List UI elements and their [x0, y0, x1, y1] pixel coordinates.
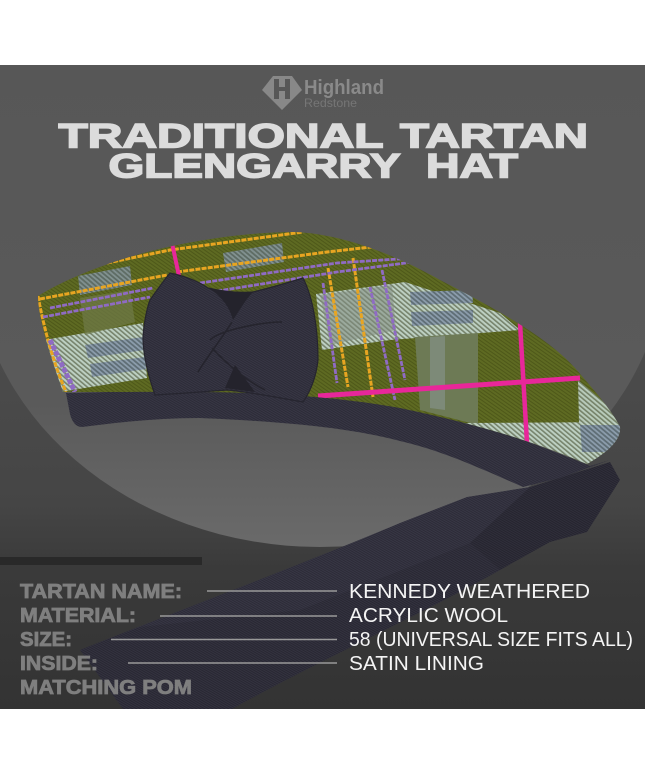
hat tail ribbon	[80, 462, 620, 709]
connector lines	[111, 591, 337, 663]
spec labels: MATCHING POM	[20, 677, 192, 699]
tartan hat crown	[30, 225, 630, 475]
title: TRADITIONAL	[58, 118, 384, 156]
spec labels: INSIDE:	[20, 653, 98, 675]
spec values: ACRYLIC WOOL	[349, 605, 508, 627]
title: GLENGARRY	[108, 148, 401, 186]
spec values: KENNEDY WEATHERED	[349, 581, 590, 603]
icon: logo diamond	[262, 76, 302, 110]
title: HAT	[426, 148, 518, 186]
spec values: SATIN LINING	[349, 653, 484, 675]
hat band	[66, 390, 610, 487]
pink stripes	[172, 243, 580, 443]
spec values: 58 (UNIVERSAL SIZE FITS ALL)	[349, 629, 633, 651]
logo: Redstone	[304, 96, 357, 110]
background curved arc	[0, 255, 645, 547]
pale check blocks	[44, 243, 625, 466]
title	[58, 118, 588, 186]
logo	[262, 76, 384, 110]
divider bar	[0, 557, 202, 565]
spec labels: TARTAN NAME:	[20, 581, 182, 603]
brand name: Highland	[304, 77, 384, 99]
hat bow	[143, 273, 318, 402]
yellow stripes	[38, 232, 380, 397]
spec labels: MATERIAL:	[20, 605, 136, 627]
purple stripes	[43, 258, 413, 400]
spec labels	[20, 581, 192, 699]
spec values	[349, 581, 633, 675]
title: TARTAN	[400, 118, 588, 156]
spec labels: SIZE:	[20, 629, 72, 651]
